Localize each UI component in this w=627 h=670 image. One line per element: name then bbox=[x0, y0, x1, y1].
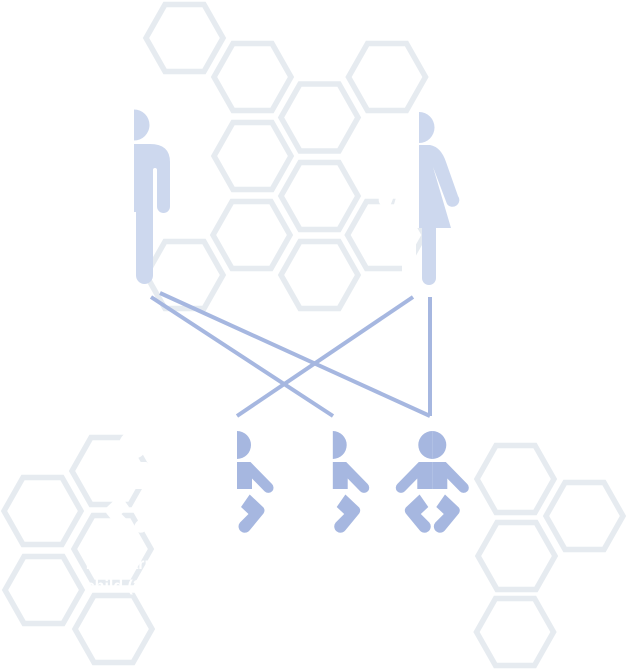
label: non-carrier child: non-carrier bbox=[86, 556, 170, 573]
icon: carrier baby one bbox=[200, 431, 274, 533]
label: right parent: Parent bbox=[486, 188, 537, 205]
icon: affected baby bbox=[396, 431, 469, 533]
label: carrier children: carrier children bbox=[231, 556, 347, 573]
icon: carrier baby two bbox=[296, 431, 369, 533]
label: right parent: Carrier bbox=[485, 166, 537, 183]
hexagon background: top cluster bbox=[146, 4, 426, 308]
label: left parent: Carrier bbox=[6, 166, 58, 183]
label: left parent: Parent bbox=[7, 188, 58, 205]
label: affected child: affected bbox=[400, 556, 462, 573]
hexagon background: bottom left cluster bbox=[4, 438, 152, 662]
inheritance lines: mutated gene (blue) bbox=[151, 293, 430, 416]
inheritance lines: normal gene (white) bbox=[132, 292, 427, 416]
hexagon background: bottom right cluster bbox=[476, 446, 623, 666]
label: carrier children: (50%) bbox=[270, 578, 312, 595]
label: non-carrier child: child (25%) bbox=[86, 578, 170, 595]
label: affected child: child (25%) bbox=[392, 578, 476, 595]
icon: non-carrier baby bbox=[96, 431, 170, 533]
icon: mother, carrier bbox=[379, 112, 459, 285]
icon: father, carrier bbox=[98, 110, 170, 284]
